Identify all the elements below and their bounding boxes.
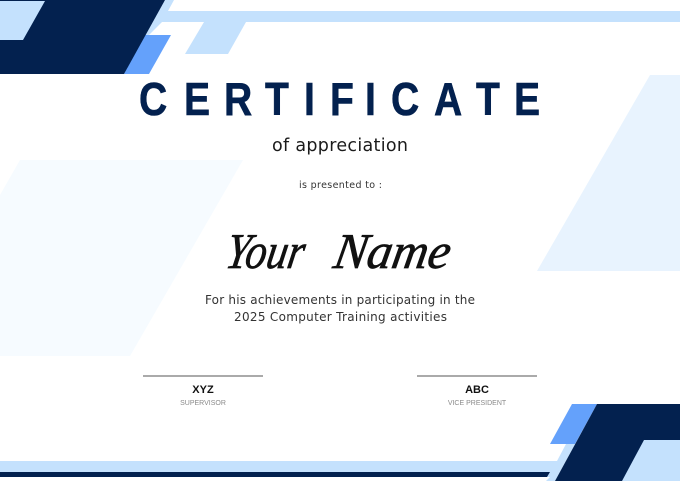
top-left corner decoration bbox=[0, 0, 680, 74]
title: CERTIFICATE bbox=[139, 74, 540, 126]
signature block: supervisor: SUPERVISOR bbox=[180, 400, 226, 407]
description text: 2025 Computer Training activities bbox=[234, 310, 447, 324]
description text bbox=[205, 293, 475, 324]
recipient name: Your bbox=[222, 223, 310, 279]
signature block: supervisor: XYZ bbox=[192, 384, 214, 396]
presented to line: is presented to : bbox=[299, 180, 382, 191]
description text: For his achievements in participating in the bbox=[205, 293, 475, 307]
signature block: supervisor bbox=[143, 376, 263, 407]
bottom-right corner decoration bbox=[0, 404, 680, 481]
signature block: vice president: VICE PRESIDENT bbox=[448, 400, 507, 407]
panel: pale left parallelogram bbox=[0, 160, 243, 356]
signature block: vice president bbox=[417, 376, 537, 407]
subtitle: of appreciation bbox=[272, 136, 408, 156]
recipient name: Name bbox=[329, 223, 456, 279]
signature block: vice president: ABC bbox=[465, 384, 489, 396]
recipient name bbox=[222, 223, 456, 279]
panel: pale right parallelogram bbox=[537, 75, 680, 271]
